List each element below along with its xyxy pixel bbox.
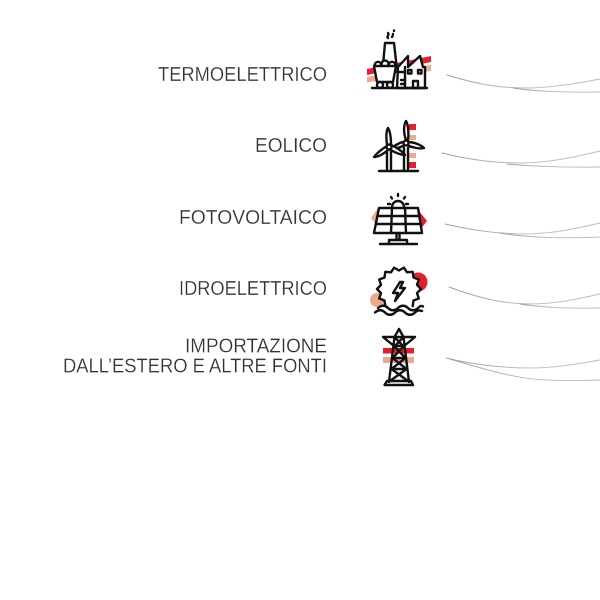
icon: hydroelectric gear and water [370,268,428,315]
label: termoelettrico: TERMOELETTRICO [158,64,327,86]
label: importazione dall'estero e altre fonti [63,336,327,378]
label: fotovoltaico: FOTOVOLTAICO [179,207,327,229]
label: eolico: EOLICO [255,135,327,157]
label: idroelettrico: IDROELETTRICO [179,278,327,300]
icon: solar panel [371,194,427,244]
icon: thermoelectric plant [367,30,431,88]
curved lines: importazione [446,358,600,381]
label: importazione dall'estero e altre fonti: DALL’ESTERO E ALTRE FONTI [63,356,327,378]
curved lines: fotovoltaico [445,223,600,238]
curved lines: termoelettrico [447,75,600,92]
icon: transmission tower [383,329,415,385]
label: importazione dall'estero e altre fonti: IMPORTAZIONE [185,336,327,358]
icon: wind turbines [374,121,424,171]
curved lines: eolico [442,151,600,167]
curved lines: idroelettrico [449,287,600,308]
